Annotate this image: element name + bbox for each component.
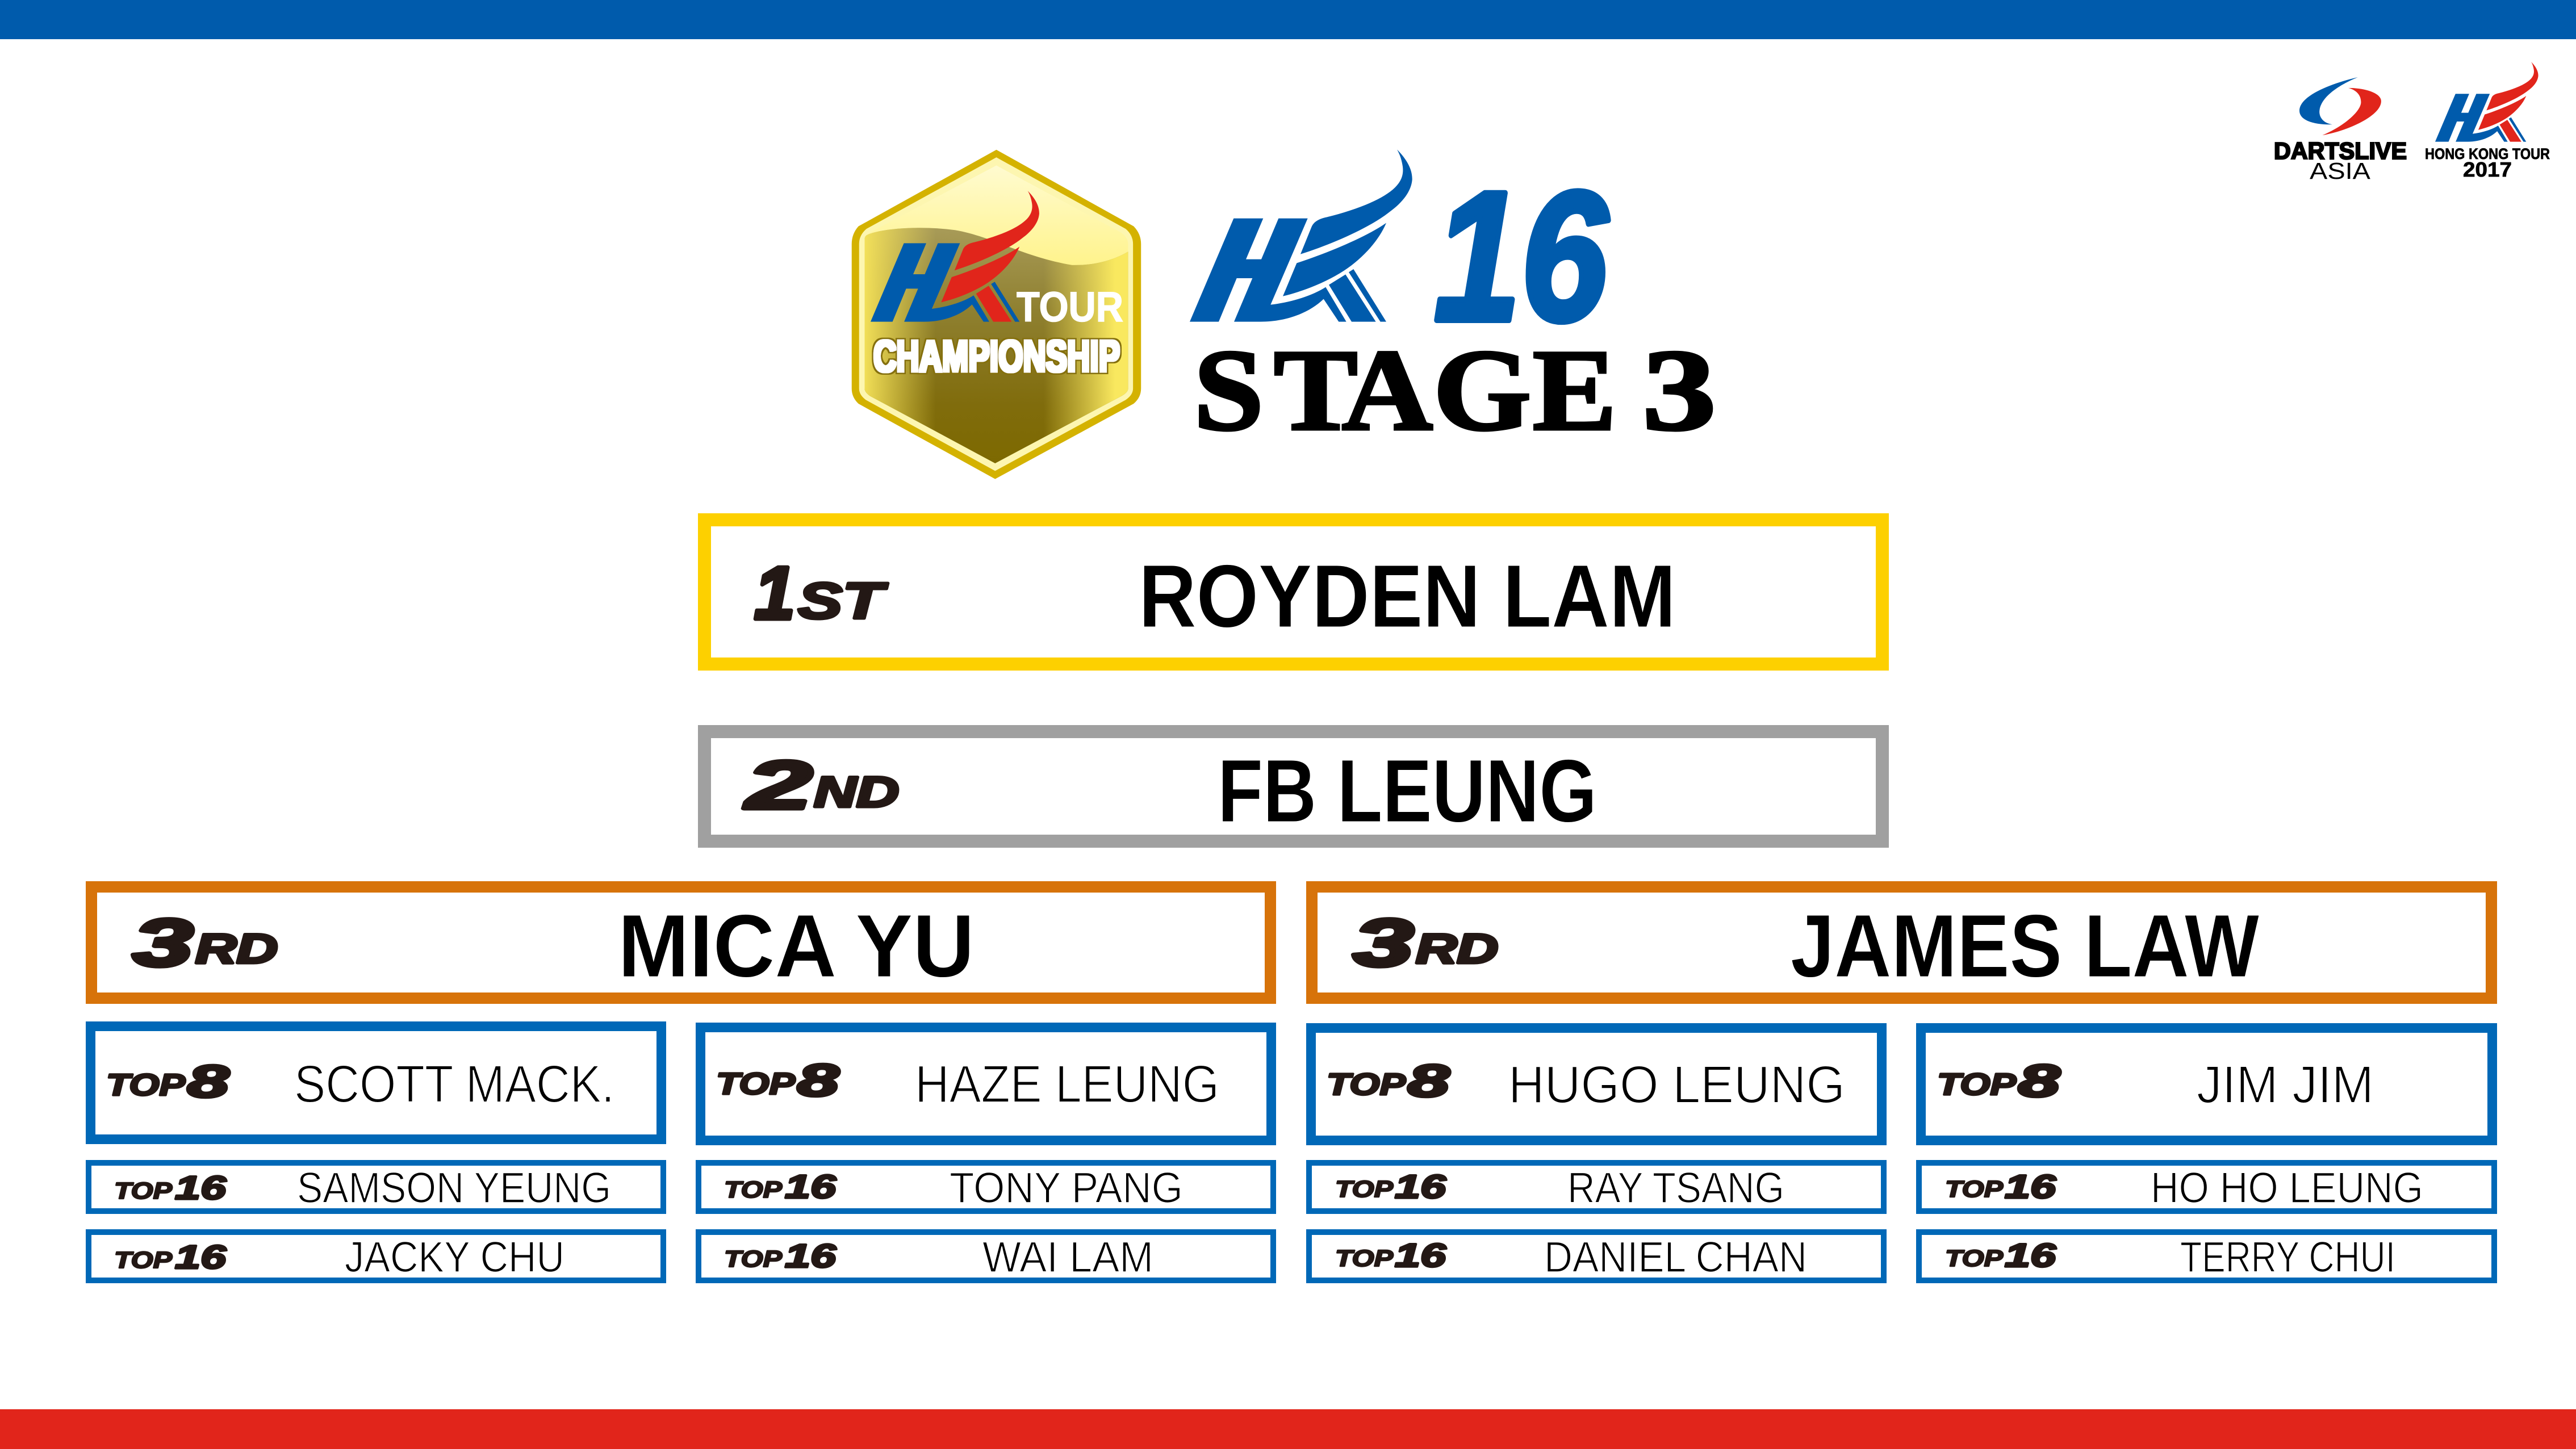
rank label [1327,1056,1450,1106]
rank label: 3 [1353,906,1414,981]
panel: top 8 Jim Jim [1921,1028,2492,1140]
panel: 2nd place [704,731,1882,841]
frame [1312,887,2491,998]
frame [699,1163,1273,1211]
panel: 3rd place left [91,887,1270,998]
year 2017: 2017 [2463,158,2512,181]
frame [1921,1028,2492,1140]
rank label: ND [814,768,899,816]
rank label: TOP [114,1247,173,1273]
rank label: 16 [2005,1169,2056,1205]
player name: HUGO LEUNG [1508,1055,1845,1114]
Asia wordmark: ASIA [2310,158,2371,184]
rank label [754,551,888,635]
rank label: 16 [785,1169,837,1205]
heading: HK 16 [1190,149,1609,360]
rank label [724,1238,837,1275]
badge text: CHAMPIONSHIP: CHAMPIONSHIP [873,331,1120,381]
rank label [716,1055,839,1105]
frame [1919,1232,2494,1280]
frame [1311,1028,1882,1140]
rank label [133,906,278,981]
rank label: 16 [1395,1237,1446,1274]
panel: top 16 Samson Yeung [89,1163,663,1212]
panel: top 16 Ho Ho Leung [1919,1163,2494,1212]
rank label: TOP [1327,1067,1406,1102]
rank label: 16 [175,1239,227,1276]
player name: ROYDEN LAM [1139,547,1676,646]
badge HK mark [871,191,1039,322]
rank label: TOP [1335,1245,1394,1271]
player name: HO HO LEUNG [2151,1164,2423,1212]
panel: 1st place [704,520,1882,664]
panel: top 16 Terry Chui [1919,1232,2494,1282]
DartsLive wordmark: DARTSLIVE [2274,137,2407,164]
panel: top 16 Wai Lam [699,1232,1273,1282]
rank label [114,1239,227,1276]
frame [89,1232,663,1280]
player name: TERRY CHUI [2180,1233,2395,1282]
icon: HK wing mark [2435,62,2539,142]
rank label: 16 [2005,1237,2056,1274]
player name: JIM JIM [2197,1055,2374,1114]
player name: FB LEUNG [1218,742,1597,841]
bottom red bar [0,1409,2576,1449]
rank label [106,1056,229,1107]
rank label [114,1170,227,1207]
rank label: TOP [114,1178,173,1204]
rank label [745,747,899,823]
rank label: 2 [745,747,812,823]
rank label: 1 [754,551,795,635]
frame [91,1027,661,1139]
panel: top 8 Scott Mack [91,1027,661,1139]
panel: top 16 Tony Pang [699,1163,1273,1212]
frame [1309,1163,1884,1211]
panel: top 16 Ray Tsang [1309,1163,1884,1212]
icon: DartsLive swoosh [2299,77,2381,135]
player name: RAY TSANG [1567,1164,1784,1212]
player name: MICA YU [618,897,975,996]
rank label: 8 [1408,1056,1450,1106]
rank label [1353,906,1498,981]
rank label: TOP [106,1068,186,1102]
word: STAGE: STAGE [1194,326,1617,455]
rank label: 16 [785,1238,837,1275]
badge text: TOUR: TOUR [1017,283,1123,330]
rank label: 16 [175,1170,227,1207]
rank label [724,1169,837,1205]
rank label: TOP [724,1246,783,1272]
rank label: TOP [1945,1245,2004,1271]
player name: JACKY CHU [345,1233,564,1282]
frame [704,731,1882,841]
player name: TONY PANG [950,1164,1183,1212]
badge: HK Tour Championship [852,150,1141,479]
panel: top 16 Jacky Chu [89,1232,663,1282]
heading: Stage 3 [1194,326,1716,455]
rank label [1335,1237,1446,1274]
frame [704,520,1882,664]
frame [89,1163,663,1211]
rank label: TOP [1937,1067,2017,1102]
rank label [1335,1169,1446,1205]
rank label: ST [798,573,888,630]
logo: DartsLive Asia [2274,77,2407,184]
numeral: 3: 3 [1642,326,1716,455]
player name: JAMES LAW [1791,897,2260,996]
rank label: 8 [797,1055,839,1105]
frame [699,1232,1273,1280]
rank label: TOP [716,1067,796,1101]
rank label: TOP [724,1176,783,1203]
frame [1309,1232,1884,1280]
rank label: 3 [133,906,193,981]
rank label: 16 [1395,1169,1446,1205]
logo: Hong Kong Tour 2017 [2425,62,2550,181]
panel: top 8 Hugo Leung [1311,1028,1882,1140]
rank label [1945,1169,2056,1205]
player name: SAMSON YEUNG [297,1164,611,1212]
rank label: TOP [1945,1176,2004,1202]
panel: top 16 Daniel Chan [1309,1232,1884,1282]
player name: SCOTT MACK. [294,1054,614,1113]
panel: 3rd place right [1312,887,2491,998]
number 16: 16 [1434,153,1609,360]
panel: top 8 Haze Leung [701,1028,1271,1140]
player name: HAZE LEUNG [915,1054,1219,1113]
rank label: 8 [187,1056,229,1107]
frame [701,1028,1271,1140]
rank label: 8 [2018,1056,2060,1106]
rank label: RD [1416,926,1498,972]
icon: HK wing mark large [1190,149,1412,322]
player name: DANIEL CHAN [1544,1233,1807,1282]
frame [91,887,1270,998]
badge hexagon [852,150,1141,479]
player name: WAI LAM [982,1233,1153,1282]
Hong Kong Tour wordmark: HONG KONG TOUR [2425,145,2550,162]
rank label: RD [195,926,278,972]
frame [1919,1163,2494,1211]
rank label [1937,1056,2060,1106]
rank label [1945,1237,2056,1274]
top blue bar [0,0,2576,39]
rank label: TOP [1335,1176,1394,1202]
